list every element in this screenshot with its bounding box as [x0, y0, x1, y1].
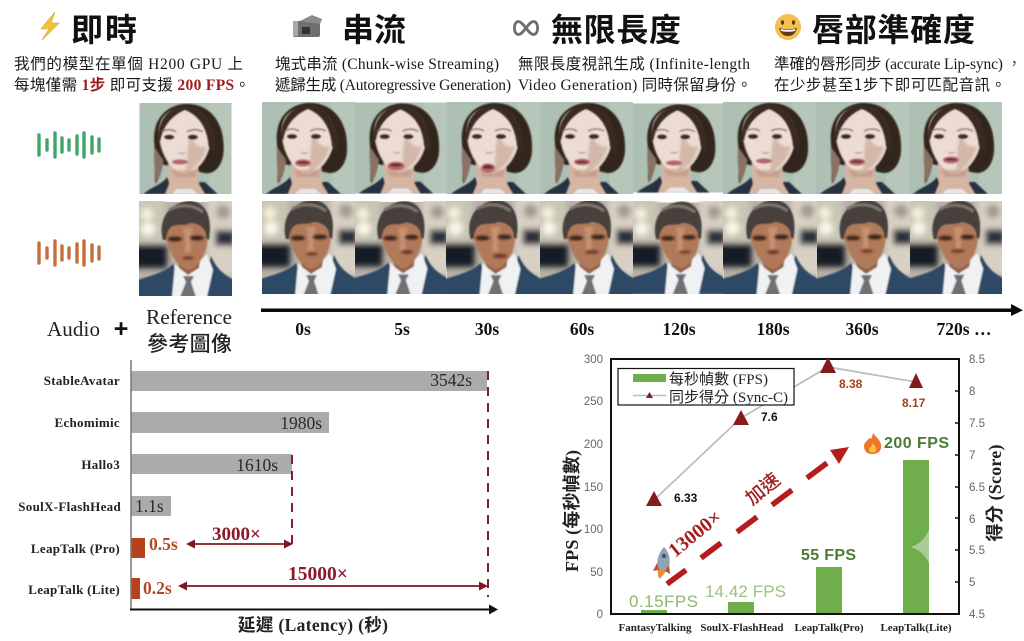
- dashed guide: 3000x: [291, 455, 293, 545]
- panel: woman generated frames: [172, 102, 1002, 194]
- FPS value labels: 0.15FPS: [629, 592, 698, 611]
- heading: lip accuracy column: [775, 5, 975, 51]
- dashed guide: 15000x: [487, 371, 489, 597]
- timeline labels: 120s: [662, 319, 696, 339]
- icon: green audio waveform: [39, 133, 99, 157]
- arrow: timeline: [261, 304, 1023, 316]
- heading: streaming column: [293, 5, 406, 51]
- bar: Echomimic: [54, 412, 329, 433]
- right axis ticks: 4.5: [969, 609, 985, 621]
- panel: man generated frames: [182, 195, 1007, 296]
- legend: 同步得分 (Sync-C): [669, 386, 788, 407]
- sync score values: [674, 377, 926, 505]
- left axis ticks: 100: [584, 524, 603, 536]
- label: audio plus reference: 參考圖像: [147, 328, 232, 358]
- arrow: 15000x: [178, 564, 488, 590]
- reference portrait: woman: [140, 103, 231, 194]
- text: streaming description: [275, 52, 511, 95]
- plot frame: [611, 359, 959, 614]
- x axis labels: [619, 622, 952, 634]
- text: real-time description: 我們的模型在單個 H200 GPU 上: [14, 52, 243, 74]
- sync score values: 7.6: [761, 410, 778, 424]
- timeline labels: 5s: [394, 319, 410, 339]
- icon: infinity: [514, 22, 538, 34]
- axis title: score: 得分 (Score): [981, 444, 1007, 542]
- title: real-time: 即時: [71, 5, 137, 51]
- reference portrait: man: [133, 196, 237, 297]
- label: 13000x: 13000×: [664, 506, 726, 562]
- FPS value labels: [629, 435, 949, 611]
- timeline labels: 720s …: [937, 319, 991, 339]
- timeline labels: 180s: [756, 319, 790, 339]
- text: streaming description: 遞歸生成 (Autoregressive Generation): [275, 73, 511, 95]
- heading: real-time column: [41, 5, 137, 51]
- left axis ticks: [584, 354, 603, 621]
- arrow: 3000x: 3000×: [212, 524, 261, 545]
- text: infinite length description: 無限長度視訊生成 (Infinite-length: [518, 52, 750, 74]
- x axis labels: FantasyTalking: [619, 622, 692, 634]
- bar: LeapTalk Lite: 0.2s: [143, 578, 172, 598]
- left axis ticks: 250: [584, 396, 603, 408]
- axes: [130, 360, 498, 614]
- text: infinite length description: Video Generation) 同時保留身份。: [518, 73, 752, 95]
- left axis ticks: 50: [590, 567, 603, 579]
- legend: [618, 368, 794, 407]
- timeline labels: 60s: [570, 319, 594, 339]
- FPS value labels: 14.42 FPS: [705, 582, 786, 601]
- right axis ticks: [955, 354, 985, 621]
- right axis ticks: 7: [969, 450, 975, 462]
- bar: LeapTalk Lite: LeapTalk (Lite): [28, 582, 120, 597]
- right axis ticks: 8: [969, 386, 975, 398]
- right axis ticks: 5.5: [969, 545, 985, 557]
- bar: Hallo3: Hallo3: [81, 457, 120, 472]
- x axis labels: LeapTalk(Pro): [794, 622, 864, 634]
- right axis ticks: 5: [969, 577, 975, 589]
- timeline labels: 0s: [295, 319, 311, 339]
- x axis labels: LeapTalk(Lite): [880, 622, 952, 634]
- bar: SoulX-FlashHead: 1.1s: [135, 496, 164, 516]
- label: audio plus reference: [47, 305, 232, 358]
- glint on bar: [911, 530, 929, 563]
- bar: StableAvatar: 3542s: [430, 370, 472, 390]
- text: infinite length description: [518, 52, 752, 95]
- label: audio plus reference: Reference: [146, 305, 232, 329]
- label: audio plus reference: +: [114, 315, 128, 343]
- bar: LeapTalk Pro: 0.5s: [149, 534, 178, 554]
- arrow: 15000x: 15000×: [288, 564, 348, 585]
- bar: SoulX-FlashHead: SoulX-FlashHead: [18, 499, 121, 514]
- sync score values: 6.33: [674, 491, 698, 505]
- left axis ticks: 300: [584, 354, 603, 366]
- icon: lightning bolt: [41, 12, 59, 40]
- icon: rocket: [653, 547, 670, 579]
- bar: Echomimic: Echomimic: [54, 415, 120, 430]
- bar: Echomimic: 1980s: [280, 413, 322, 433]
- FPS value labels: 55 FPS: [801, 547, 856, 564]
- icon: flame: [864, 433, 881, 454]
- chart: latency bars: [18, 360, 498, 637]
- title: streaming: 串流: [342, 5, 406, 51]
- x axis labels: SoulX-FlashHead: [700, 622, 784, 634]
- arrow: 3000x: [186, 524, 293, 548]
- FPS value labels: 200 FPS: [884, 435, 949, 452]
- text: lip accuracy description: [774, 52, 1022, 95]
- bar: LeapTalk Pro: [31, 534, 178, 558]
- bar: SoulX-FlashHead: [18, 496, 171, 516]
- text: real-time description: 每塊僅需 1步 即可支援 200 FPS。: [14, 73, 250, 95]
- text: real-time description: [14, 52, 250, 95]
- text: lip accuracy description: 準確的唇形同步 (accurate Lip-sync) ，: [774, 52, 1022, 74]
- bar: StableAvatar: StableAvatar: [44, 373, 120, 388]
- arrow: acceleration: [667, 447, 849, 584]
- sync score values: 8.17: [902, 396, 926, 410]
- right axis ticks: 6.5: [969, 482, 985, 494]
- bar: LeapTalk Lite: [28, 578, 172, 599]
- legend: 每秒幀數 (FPS): [669, 368, 768, 389]
- left axis ticks: 200: [584, 439, 603, 451]
- chart: FPS and sync score: [558, 354, 1007, 634]
- icon: video camera: [293, 15, 322, 37]
- right axis ticks: 6: [969, 514, 975, 526]
- right axis ticks: 8.5: [969, 354, 985, 366]
- title: infinite length: 無限長度: [551, 5, 681, 51]
- heading: infinite length column: [514, 5, 681, 51]
- line: sync score: [646, 357, 923, 506]
- timeline labels: [295, 319, 991, 339]
- bar: Hallo3: 1610s: [236, 455, 278, 475]
- timeline labels: 360s: [845, 319, 879, 339]
- icon: smiley face: [775, 14, 801, 40]
- green FPS bars: [641, 460, 929, 614]
- bar: StableAvatar: [44, 370, 487, 391]
- bar: LeapTalk Pro: LeapTalk (Pro): [31, 541, 120, 556]
- bar: Hallo3: [81, 454, 292, 475]
- timeline labels: 30s: [475, 319, 499, 339]
- title: lip accuracy: 唇部準確度: [812, 5, 975, 51]
- right axis ticks: 7.5: [969, 418, 985, 430]
- sync score values: 8.38: [839, 377, 863, 391]
- label: audio plus reference: Audio: [47, 317, 100, 341]
- axis title: latency: 延遲 (Latency) (秒): [238, 612, 388, 637]
- left axis ticks: 150: [584, 482, 603, 494]
- left axis ticks: 0: [597, 609, 603, 621]
- icon: orange audio waveform: [39, 241, 99, 265]
- label: acceleration: 加速: [739, 466, 785, 511]
- text: lip accuracy description: 在少步甚至1步下即可匹配音訊。: [774, 73, 1006, 95]
- text: streaming description: 塊式串流 (Chunk-wise Streaming): [275, 52, 499, 74]
- axis title: FPS: FPS (每秒幀數): [558, 450, 584, 572]
